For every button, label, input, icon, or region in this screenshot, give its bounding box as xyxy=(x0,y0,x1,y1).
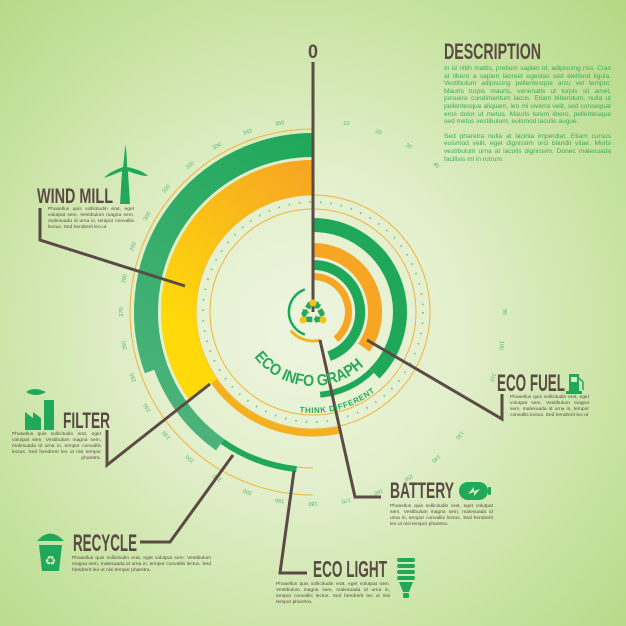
curved title: THINK DIFFERENT xyxy=(300,388,374,413)
outer scale labels: 180 xyxy=(308,500,318,506)
outer scale labels: 350 xyxy=(275,120,285,128)
outer scale labels: 110 xyxy=(488,372,497,382)
recycle text: Phasellus quis sollicitudin erat, eget volutpat sem. Vestibulum magna sem, malesuada id urna in, tempor convallis lectus. Sed hendrerit leo ut nisi tempor pharetra. xyxy=(72,556,211,573)
outer scale labels: 210 xyxy=(212,473,223,482)
outer scale labels: 130 xyxy=(454,429,465,440)
outer scale labels: 160 xyxy=(373,487,384,496)
headings: ECO FUEL xyxy=(497,370,565,397)
outer scale labels: 280 xyxy=(121,274,129,284)
zero label: 0 xyxy=(308,42,318,63)
outer green arc xyxy=(146,145,313,469)
filter text: Phasellus quis sollicitudin erat, eget volutpat sem. Vestibulum magna sem, malesuada id urna in, tempor convallis lectus. Sed hendrerit leo ut nisi tempor pharetra. xyxy=(12,432,101,461)
outer scale labels: 170 xyxy=(341,496,351,504)
description text xyxy=(444,65,611,163)
icon: light bulb xyxy=(397,558,415,598)
icon: wind mill xyxy=(104,145,148,204)
outer scale labels: 150 xyxy=(403,473,414,482)
outer scale labels: 270 xyxy=(119,307,125,317)
outer scale labels: 310 xyxy=(161,184,172,195)
vertical zero line xyxy=(312,62,314,312)
curved title xyxy=(254,350,374,413)
outer scale labels: 10 xyxy=(343,120,350,127)
headings: DESCRIPTION xyxy=(444,39,541,64)
outer scale labels: 220 xyxy=(185,453,196,464)
outer scale labels: 40 xyxy=(431,161,440,170)
big yellow arc xyxy=(179,178,340,433)
outer scale labels: 340 xyxy=(242,128,253,137)
outer scale labels: 250 xyxy=(129,372,138,383)
outer scale labels: 260 xyxy=(121,340,129,350)
battery text: Phasellus quis sollicitudin erat, eget volutpat sem. Vestibulum magna sem, malesuada id urna in, tempor convallis lectus. Sed hendrerit leo ut nisi tempor pharetra. xyxy=(390,504,493,527)
eco fuel text: Phasellus quis sollicitudin erat, eget volutpat sem. Vestibulum magna sem, malesuada id urna in, tempor convallis lectus. Sed hendrerit leo ut xyxy=(510,395,589,418)
icon: recycle bin: ♻ xyxy=(45,554,56,569)
outer scale labels: 90 xyxy=(501,309,507,315)
headings: BATTERY xyxy=(390,478,454,503)
curved title: ECO INFO GRAPH xyxy=(254,350,364,386)
headings: ECO LIGHT xyxy=(313,556,387,582)
wind mill text: Phasellus quis sollicitudin erat, eget volutpat sem. Vestibulum magna sem, malesuada id urna in, tempor convallis lectus. Sed hendrerit leo ut xyxy=(48,207,134,230)
icon: fuel pump xyxy=(566,374,583,394)
icon: battery xyxy=(459,482,491,500)
inner right arcs xyxy=(289,225,400,395)
outer scale labels: 30 xyxy=(404,142,413,151)
outer scale labels: 290 xyxy=(129,241,138,252)
leader lines xyxy=(40,208,502,573)
outer scale labels: 190 xyxy=(275,496,285,504)
icon: factory filter xyxy=(25,389,54,430)
outer scale labels: 330 xyxy=(212,142,223,151)
icon: recycle bin xyxy=(37,534,64,571)
headings xyxy=(37,39,565,582)
eco light text: Phasellus quis sollicitudin erat, eget volutpat sem. Vestibulum magna sem, malesuada id urna in, tempor convallis lectus. Sed hendrerit leo ut nisi tempor pharetra. xyxy=(276,582,390,605)
outer scale labels: 200 xyxy=(242,487,253,496)
headings: WIND MILL xyxy=(37,185,113,208)
description text: Sed pharetra nulla at lacinia imperdiet. Etiam cursus euismod velit, eget dignissim orci blandit vitae. Morbi vestibulum urna at iaculis dignissim. Donec malesuada facilisis mi in rutrum. xyxy=(444,133,611,163)
outer scale labels: 20 xyxy=(374,129,382,136)
outer scale labels: 240 xyxy=(143,402,152,413)
outer scale labels: 140 xyxy=(430,453,441,464)
outer scale labels: 230 xyxy=(161,429,172,440)
headings: FILTER xyxy=(63,408,110,433)
outer scale labels: 300 xyxy=(143,211,152,222)
icon: recycle center: ♻ xyxy=(299,294,327,332)
outer scale labels xyxy=(119,120,507,506)
inner tick ring xyxy=(203,202,423,422)
description text: In id nibh mattis, pretium sapien id, adipiscing nisi. Cras at libero a sapien laoreet egestas sed eleifend ligula. Vestibulum adipiscing pellentesque arcu vel tempor. Mauris turpis mauris, venenatis ut turpis sit amet, posuere condimentum lacus. Etiam bibendum, nulla ut pellentesque aliquam, leo mi viverra velit, sed consequat eros dolor ut metus. Mauris lorem libero, pellentesque sed metus vestibulum, euismod iaculis augue. xyxy=(444,65,611,125)
outer scale labels: 320 xyxy=(185,160,196,171)
headings: RECYCLE xyxy=(73,530,137,557)
outer scale labels: 100 xyxy=(497,340,505,350)
thin orange guide rings xyxy=(130,129,430,495)
